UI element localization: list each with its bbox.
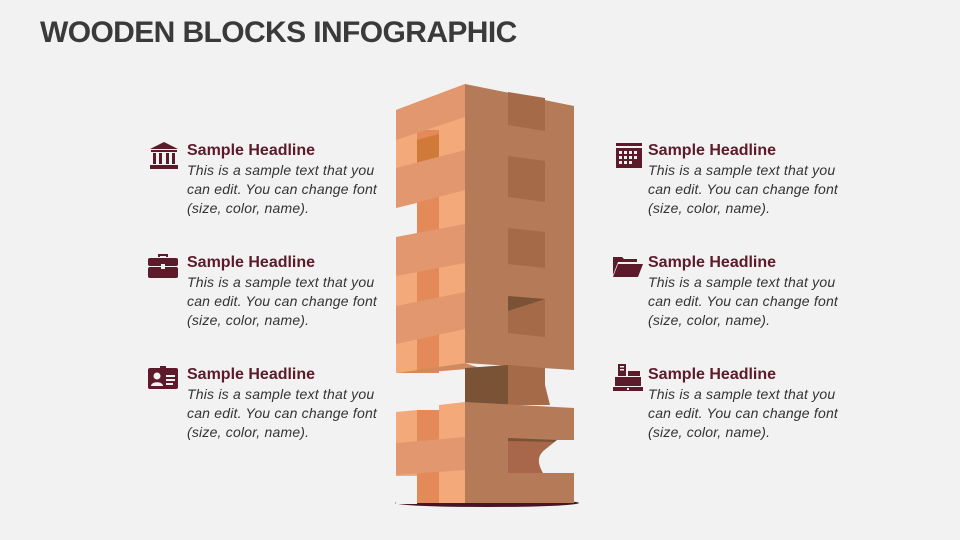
item: right 2 bbox=[648, 254, 838, 328]
item: left 3: This is a sample text that you bbox=[187, 386, 374, 402]
title: WOODEN BLOCKS INFOGRAPHIC bbox=[40, 16, 517, 49]
bottom section left face bbox=[396, 402, 465, 504]
item: left 1: (size, color, name). bbox=[187, 200, 309, 216]
item: left 1: Sample Headline bbox=[187, 142, 315, 159]
item: left 1: This is a sample text that you bbox=[187, 162, 374, 178]
shadow bbox=[395, 499, 579, 507]
item: left 2: (size, color, name). bbox=[187, 312, 309, 328]
item: left 3: can edit. You can change font bbox=[187, 405, 377, 421]
item: left 3 bbox=[187, 366, 378, 440]
item: right 3: This is a sample text that you bbox=[648, 386, 835, 402]
item: right 3: Sample Headline bbox=[648, 366, 776, 383]
item: right 3: can edit. You can change font bbox=[648, 405, 838, 421]
item: right 3: (size, color, name). bbox=[648, 424, 770, 440]
icon: briefcase bbox=[148, 254, 178, 278]
item: right 2: This is a sample text that you bbox=[648, 274, 835, 290]
item: left 1: can edit. You can change font bbox=[187, 181, 377, 197]
item: right 1: Sample Headline bbox=[648, 142, 776, 159]
icon: calendar bbox=[616, 143, 642, 168]
item: right 2: Sample Headline bbox=[648, 254, 776, 271]
icon: folder bbox=[613, 257, 643, 277]
upper section right face bbox=[465, 84, 574, 370]
item: left 2 bbox=[187, 254, 378, 328]
item: right 1: can edit. You can change font bbox=[648, 181, 838, 197]
icon: cash register bbox=[613, 364, 643, 391]
item: right 1: This is a sample text that you bbox=[648, 162, 835, 178]
item: right 1: (size, color, name). bbox=[648, 200, 770, 216]
icon: bank bbox=[150, 142, 178, 169]
item: left 2: can edit. You can change font bbox=[187, 293, 377, 309]
item: right 3 bbox=[648, 366, 838, 440]
upper section left face bbox=[396, 84, 480, 373]
item: left 3: (size, color, name). bbox=[187, 424, 309, 440]
bottom section right face bbox=[465, 402, 574, 503]
item: left 1 bbox=[187, 142, 378, 216]
item: left 2: Sample Headline bbox=[187, 254, 315, 271]
item: left 3: Sample Headline bbox=[187, 366, 315, 383]
item: right 2: (size, color, name). bbox=[648, 312, 770, 328]
middle section bbox=[465, 365, 550, 405]
icon: id card bbox=[148, 366, 178, 389]
item: left 2: This is a sample text that you bbox=[187, 274, 374, 290]
item: right 1 bbox=[648, 142, 838, 216]
item: right 2: can edit. You can change font bbox=[648, 293, 838, 309]
